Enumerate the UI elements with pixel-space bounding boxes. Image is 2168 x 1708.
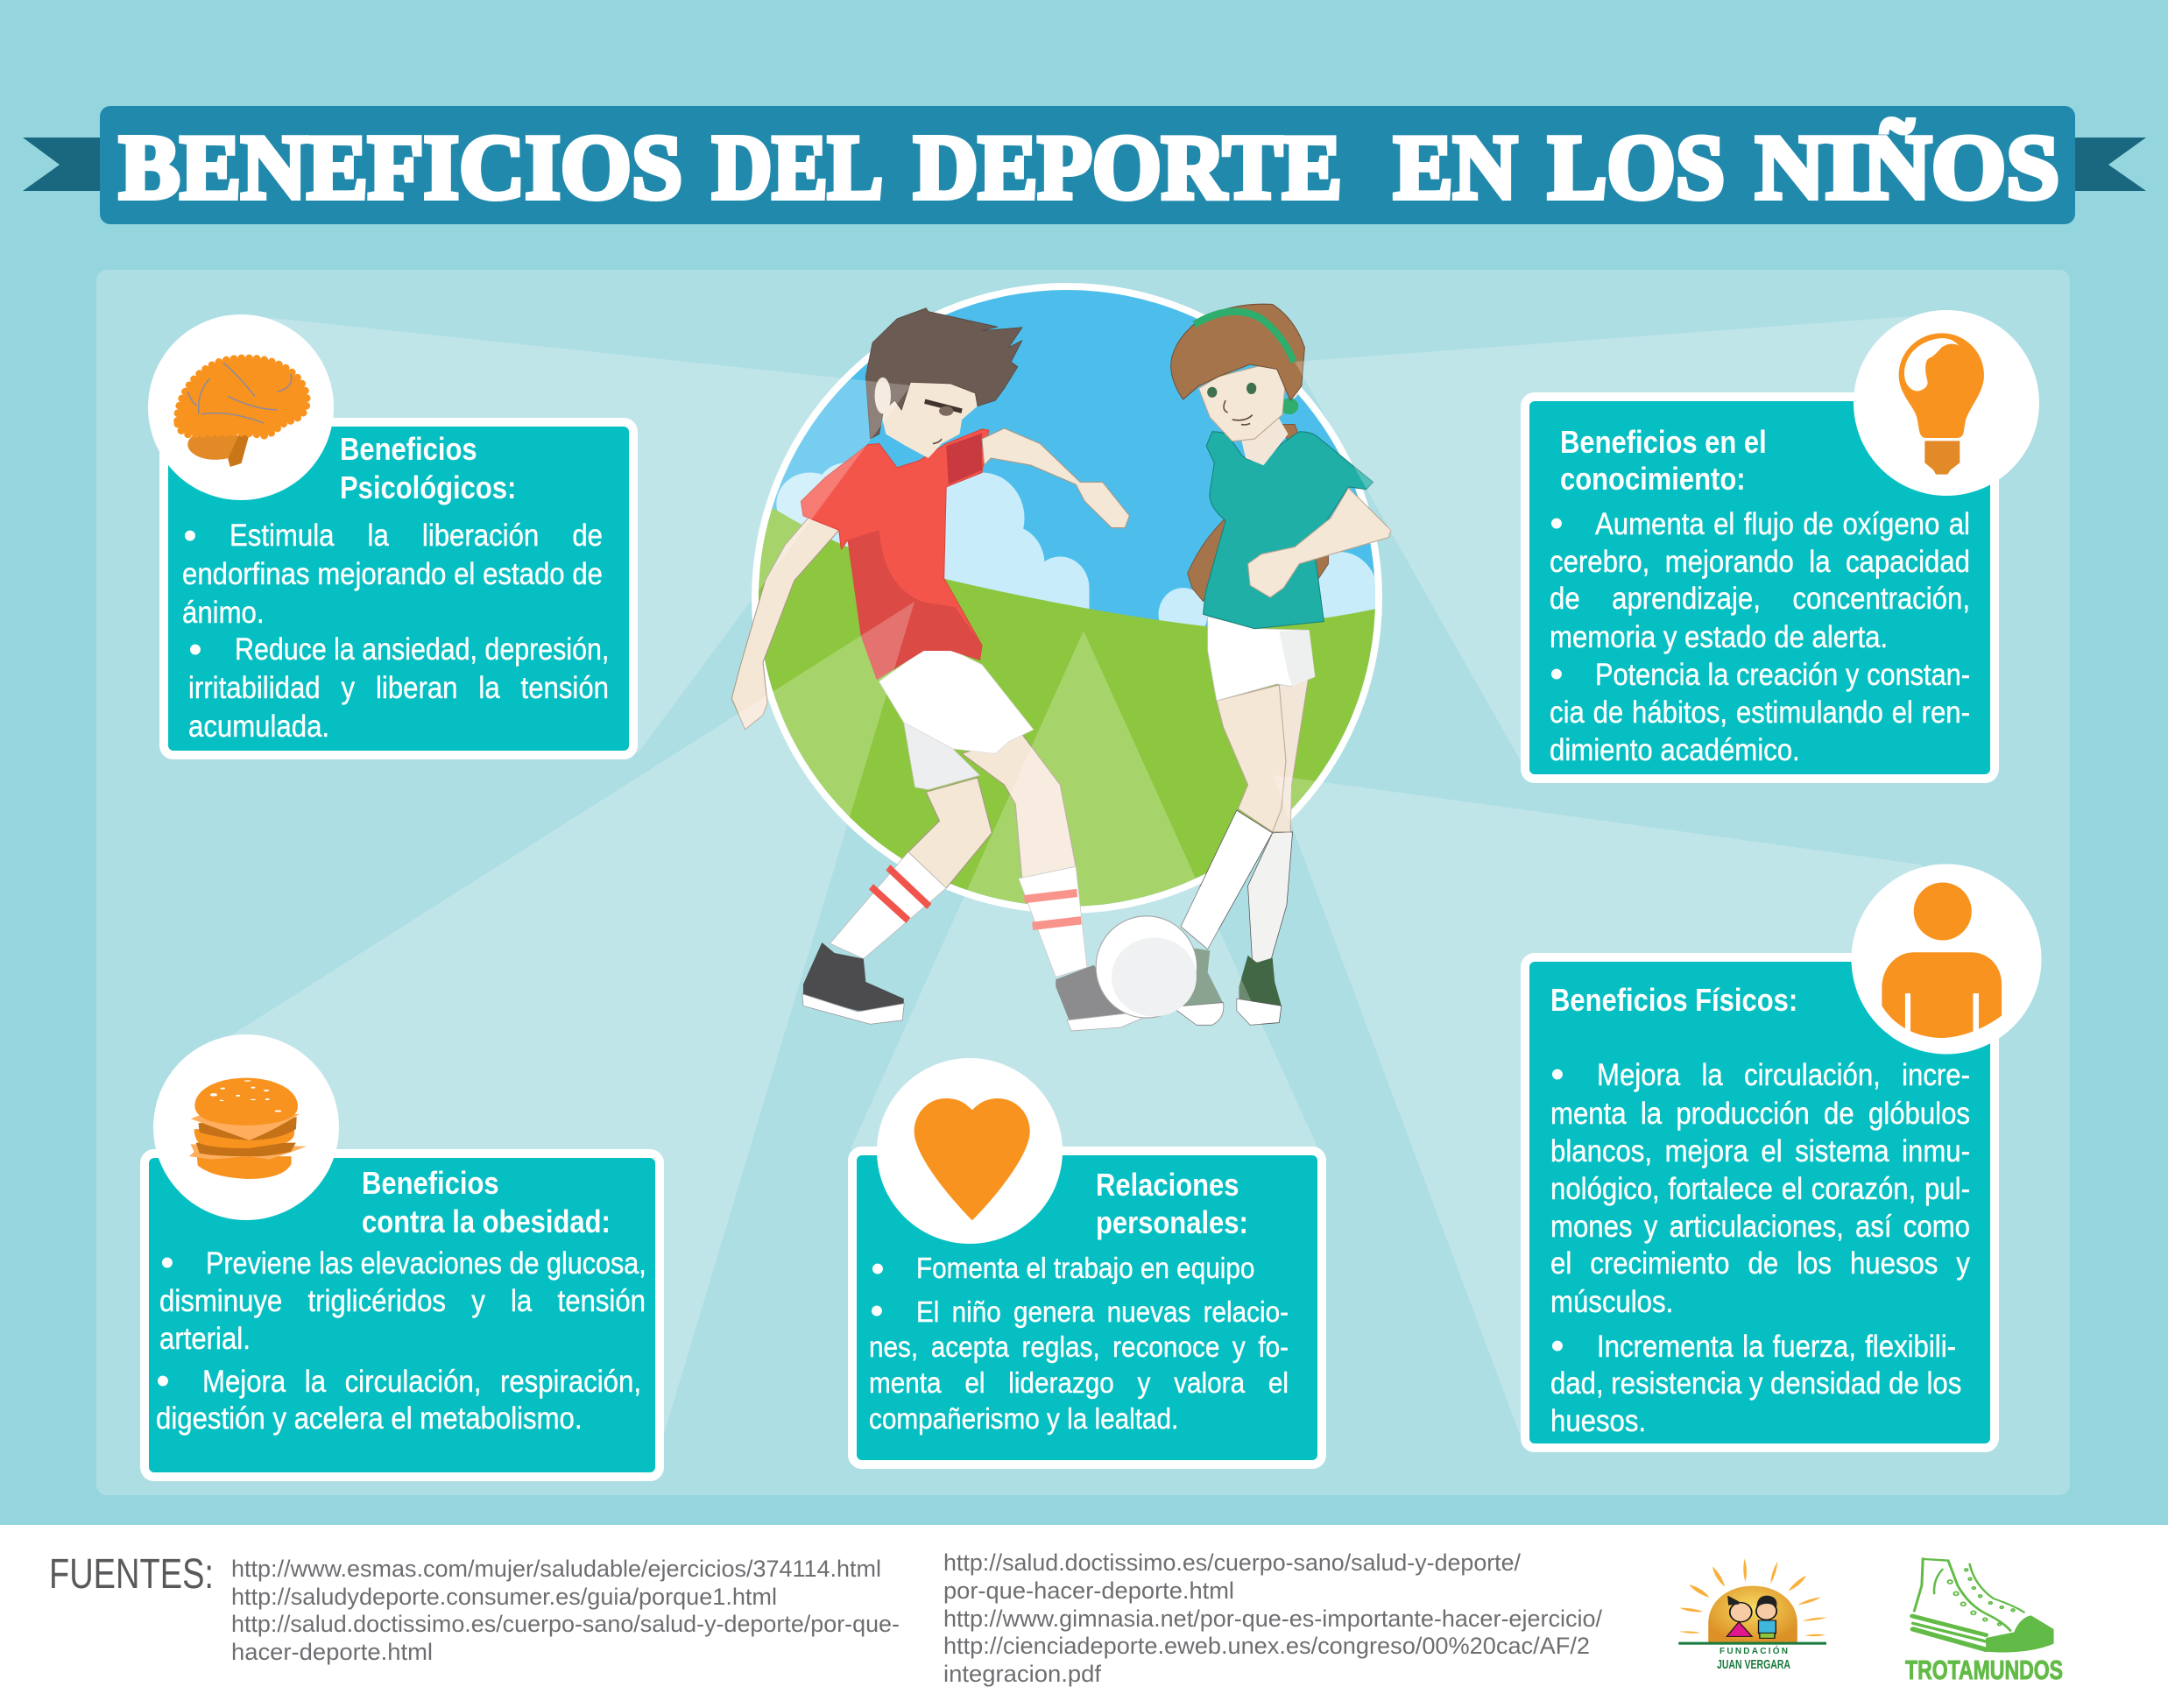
bullet list: nológico, fortalece el corazón, pul- xyxy=(1550,1172,1970,1206)
bullet list xyxy=(1550,502,1970,767)
bullet list: mones y articulaciones, así como xyxy=(1550,1210,1970,1244)
boy character xyxy=(731,308,1156,1031)
bullet list: dimiento académico. xyxy=(1550,733,1800,767)
title: NIÑOS xyxy=(1755,116,2059,218)
bullet list: cia de hábitos, estimulando el ren- xyxy=(1550,695,1970,730)
main panel background xyxy=(96,270,2070,1495)
bullet list: • xyxy=(183,514,197,557)
bullet list: • xyxy=(1550,1324,1564,1367)
panel: beneficios psicologicos xyxy=(148,314,638,759)
fuentes label: FUENTES: xyxy=(49,1551,214,1598)
bullet list: menta la producción de glóbulos xyxy=(1550,1097,1970,1130)
bullet list: músculos. xyxy=(1550,1285,1673,1319)
heading line 2: contra la obesidad: xyxy=(362,1203,611,1239)
title ribbon tails xyxy=(23,138,2146,191)
sources column 2: http://cienciadeporte.eweb.unex.es/congreso/00%20cac/AF/2 xyxy=(943,1633,1590,1659)
bullet list: Previene las elevaciones de glucosa, xyxy=(206,1246,646,1281)
bullet list: menta el liderazgo y valora el xyxy=(869,1366,1289,1398)
bullet list: • xyxy=(188,628,202,671)
panel: relaciones personales xyxy=(848,1058,1326,1469)
logo: Fundación Juan Vergara: FUNDACIÓN xyxy=(1720,1645,1788,1656)
bullet list: Mejora la circulación, incre- xyxy=(1597,1058,1970,1092)
sources column 1: http://salud.doctissimo.es/cuerpo-sano/salud-y-deporte/por-que- xyxy=(231,1611,900,1637)
bullet list xyxy=(1550,1053,1971,1438)
bullet list: digestión y acelera el metabolismo. xyxy=(156,1401,583,1436)
title banner xyxy=(100,106,2075,224)
sources column 2 xyxy=(943,1549,1602,1687)
logo: Trotamundos xyxy=(1905,1558,2063,1685)
heading: Beneficios xyxy=(340,431,477,466)
title: DEPORTE xyxy=(914,116,1342,218)
bullet list: • xyxy=(1550,1053,1564,1096)
title: LOS xyxy=(1548,116,1725,218)
bullet list: endorfinas mejorando el estado de xyxy=(182,557,603,591)
logo: Fundación Juan Vergara xyxy=(1678,1558,1827,1672)
soccer scene ball xyxy=(752,283,1382,913)
title: EN xyxy=(1394,116,1517,218)
sources column 1 xyxy=(231,1556,900,1665)
bullet list: Estimula la liberación de xyxy=(230,519,603,553)
bullet list: blancos, mejora el sistema inmu- xyxy=(1550,1134,1970,1168)
bullet list: Potencia la creación y constan- xyxy=(1595,658,1970,692)
bullet list: • xyxy=(160,1241,174,1284)
heading line 2: conocimiento: xyxy=(1560,461,1746,496)
sources column 2: http://www.gimnasia.net/por-que-es-importante-hacer-ejercicio/ xyxy=(943,1606,1602,1632)
bullet list: • xyxy=(1550,502,1564,545)
bullet list: irritabilidad y liberan la tensión xyxy=(188,671,609,705)
bullet list: • xyxy=(871,1247,885,1290)
bullet list xyxy=(869,1247,1289,1435)
bullet list: El niño genera nuevas relacio- xyxy=(916,1295,1289,1328)
bullet list: compañerismo y la lealtad. xyxy=(869,1401,1178,1435)
heading: Beneficios Físicos: xyxy=(1550,981,1797,1018)
footer band xyxy=(0,1525,2168,1708)
sources column 2: por-que-hacer-deporte.html xyxy=(943,1577,1234,1604)
bullet list: • xyxy=(1550,652,1564,695)
icon: heart xyxy=(877,1058,1063,1244)
title xyxy=(119,116,2059,218)
panel: beneficios contra la obesidad xyxy=(140,1034,664,1481)
sources column 1: http://saludydeporte.consumer.es/guia/porque1.html xyxy=(231,1584,777,1610)
bullet list: • xyxy=(870,1289,884,1332)
sources column 1: http://www.esmas.com/mujer/saludable/ejercicios/374114.html xyxy=(231,1556,881,1582)
girl character xyxy=(1171,304,1391,1025)
bullet list: Reduce la ansiedad, depresión, xyxy=(235,632,609,667)
bullet list: dad, resistencia y densidad de los xyxy=(1550,1366,1961,1401)
icon: brain xyxy=(148,314,334,500)
icon: person xyxy=(1852,864,2041,1055)
bullet list: memoria y estado de alerta. xyxy=(1550,620,1888,654)
light rays xyxy=(231,316,1946,1436)
bullet list: el crecimiento de los huesos y xyxy=(1550,1246,1970,1281)
heading: Relaciones xyxy=(1096,1167,1239,1202)
heading line 2: personales: xyxy=(1096,1203,1248,1240)
bullet list: disminuye triglicéridos y la tensión xyxy=(159,1284,646,1318)
sources column 2: http://salud.doctissimo.es/cuerpo-sano/salud-y-deporte/ xyxy=(943,1549,1521,1576)
heading line 2: Psicológicos: xyxy=(340,469,516,505)
heading: Beneficios en el xyxy=(1560,424,1767,459)
heading: Beneficios xyxy=(362,1165,499,1200)
bullet list: acumulada. xyxy=(188,709,329,744)
logo: Trotamundos: TROTAMUNDOS xyxy=(1905,1655,2063,1685)
bullet list: cerebro, mejorando la capacidad xyxy=(1550,545,1970,578)
icon: light bulb xyxy=(1854,310,2039,496)
title: DEL xyxy=(712,116,883,218)
bullet list: Mejora la circulación, respiración, xyxy=(202,1365,641,1399)
sources column 1: hacer-deporte.html xyxy=(231,1639,433,1665)
panel: beneficios en el conocimiento xyxy=(1521,310,2039,783)
bullet list: Fomenta el trabajo en equipo xyxy=(916,1251,1254,1284)
bullet list xyxy=(182,514,609,744)
panel: beneficios fisicos xyxy=(1521,864,2041,1452)
bullet list: ánimo. xyxy=(182,596,265,630)
bullet list: nes, acepta reglas, reconoce y fo- xyxy=(869,1330,1289,1363)
bullet list: Incrementa la fuerza, flexibili- xyxy=(1597,1330,1956,1364)
bullet list: arterial. xyxy=(159,1322,251,1356)
soccer ball xyxy=(1096,916,1197,1018)
bullet list: de aprendizaje, concentración, xyxy=(1550,582,1970,616)
bullet list: • xyxy=(156,1359,170,1402)
bullet list xyxy=(156,1241,646,1436)
icon: hamburger xyxy=(153,1034,339,1220)
sources column 2: integracion.pdf xyxy=(943,1661,1102,1687)
logo: Fundación Juan Vergara: JUAN VERGARA xyxy=(1717,1657,1790,1672)
bullet list: huesos. xyxy=(1550,1404,1646,1438)
bullet list: Aumenta el flujo de oxígeno al xyxy=(1595,507,1970,541)
title: BENEFICIOS xyxy=(119,116,682,218)
